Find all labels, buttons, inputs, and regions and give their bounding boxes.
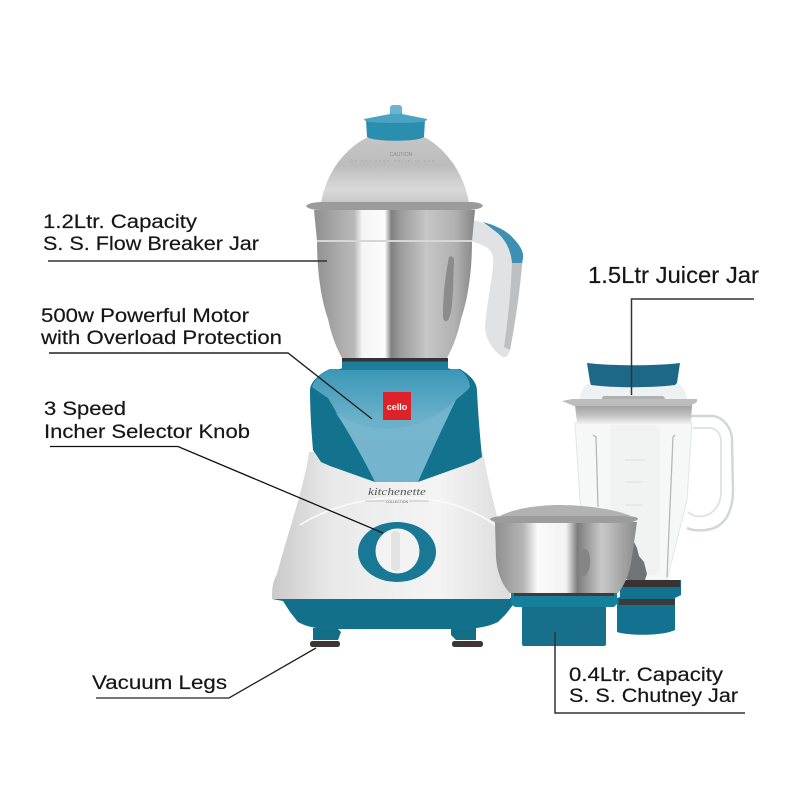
jar rim [306, 202, 483, 210]
Kitchenette collection mark: COLLECTION [386, 500, 409, 504]
teal base [272, 598, 516, 629]
juicer handle [687, 416, 733, 530]
label: motor [40, 306, 282, 349]
callout: motor [40, 306, 372, 419]
chutney lid [500, 505, 631, 516]
cello logo [383, 392, 411, 420]
white motor body [272, 452, 510, 599]
teal shoulder [310, 369, 482, 482]
leader line: legs [96, 648, 316, 698]
label: 1.2Ltr jar [43, 212, 260, 255]
cello logo: cello [387, 402, 408, 412]
leader line: motor [49, 353, 372, 419]
label: juicer jar: 1.5Ltr Juicer Jar [588, 262, 759, 288]
label: knob: Incher Selector Knob [44, 422, 250, 443]
juicer rim [562, 399, 697, 406]
label: motor: with Overload Protection [40, 328, 282, 349]
juicer steel band [575, 405, 692, 423]
juicer lid dome [580, 384, 687, 401]
label: chutney jar: S. S. Chutney Jar [569, 686, 739, 707]
juicer blade [625, 538, 647, 580]
speed selector knob [358, 522, 436, 582]
motor base feet [310, 628, 483, 647]
label: knob: 3 Speed [44, 399, 126, 420]
Kitchenette collection mark [365, 486, 429, 504]
chutney jar [490, 505, 638, 646]
label: chutney jar: 0.4Ltr. Capacity [569, 665, 724, 686]
lid dome: Do not open while in use [350, 159, 434, 163]
main blender [272, 358, 516, 647]
lid cap [364, 105, 427, 141]
chutney base block [522, 606, 606, 646]
chutney steel bowl [495, 522, 637, 593]
label: chutney jar [569, 665, 739, 707]
label: 1.2Ltr jar: 1.2Ltr. Capacity [43, 212, 198, 233]
leader line: knob [50, 446, 383, 533]
body arc highlight [300, 498, 506, 535]
juicer jar [562, 363, 733, 635]
collar [338, 360, 452, 370]
lower panel shade [335, 400, 456, 482]
callout: jar capacity [43, 212, 327, 261]
label: motor: 500w Powerful Motor [41, 306, 250, 327]
juicer glass body [575, 423, 692, 580]
main jar [306, 105, 523, 358]
steel jar body [314, 210, 475, 358]
leader line: jar [48, 260, 327, 262]
measure marks [625, 460, 645, 505]
callout: chutney jar [555, 632, 745, 713]
juicer teal cap [587, 363, 680, 387]
label: vacuum legs: Vacuum Legs [92, 673, 227, 694]
callout: vacuum legs [92, 648, 316, 698]
chutney teal ring [511, 593, 617, 607]
callout: knob [44, 399, 383, 533]
juicer base [617, 580, 681, 635]
callout: juicer jar [588, 262, 759, 395]
label: 1.2Ltr jar: S. S. Flow Breaker Jar [43, 234, 260, 255]
lid dome [321, 135, 469, 203]
light blue shoulder panel [312, 369, 470, 482]
lid dome: CAUTION [390, 152, 413, 158]
leader line: chutney [555, 632, 745, 713]
jar handle [460, 218, 523, 357]
label: knob [44, 399, 250, 443]
Kitchenette collection mark: kitchenette [368, 486, 426, 498]
leader line: juicer [632, 299, 754, 395]
